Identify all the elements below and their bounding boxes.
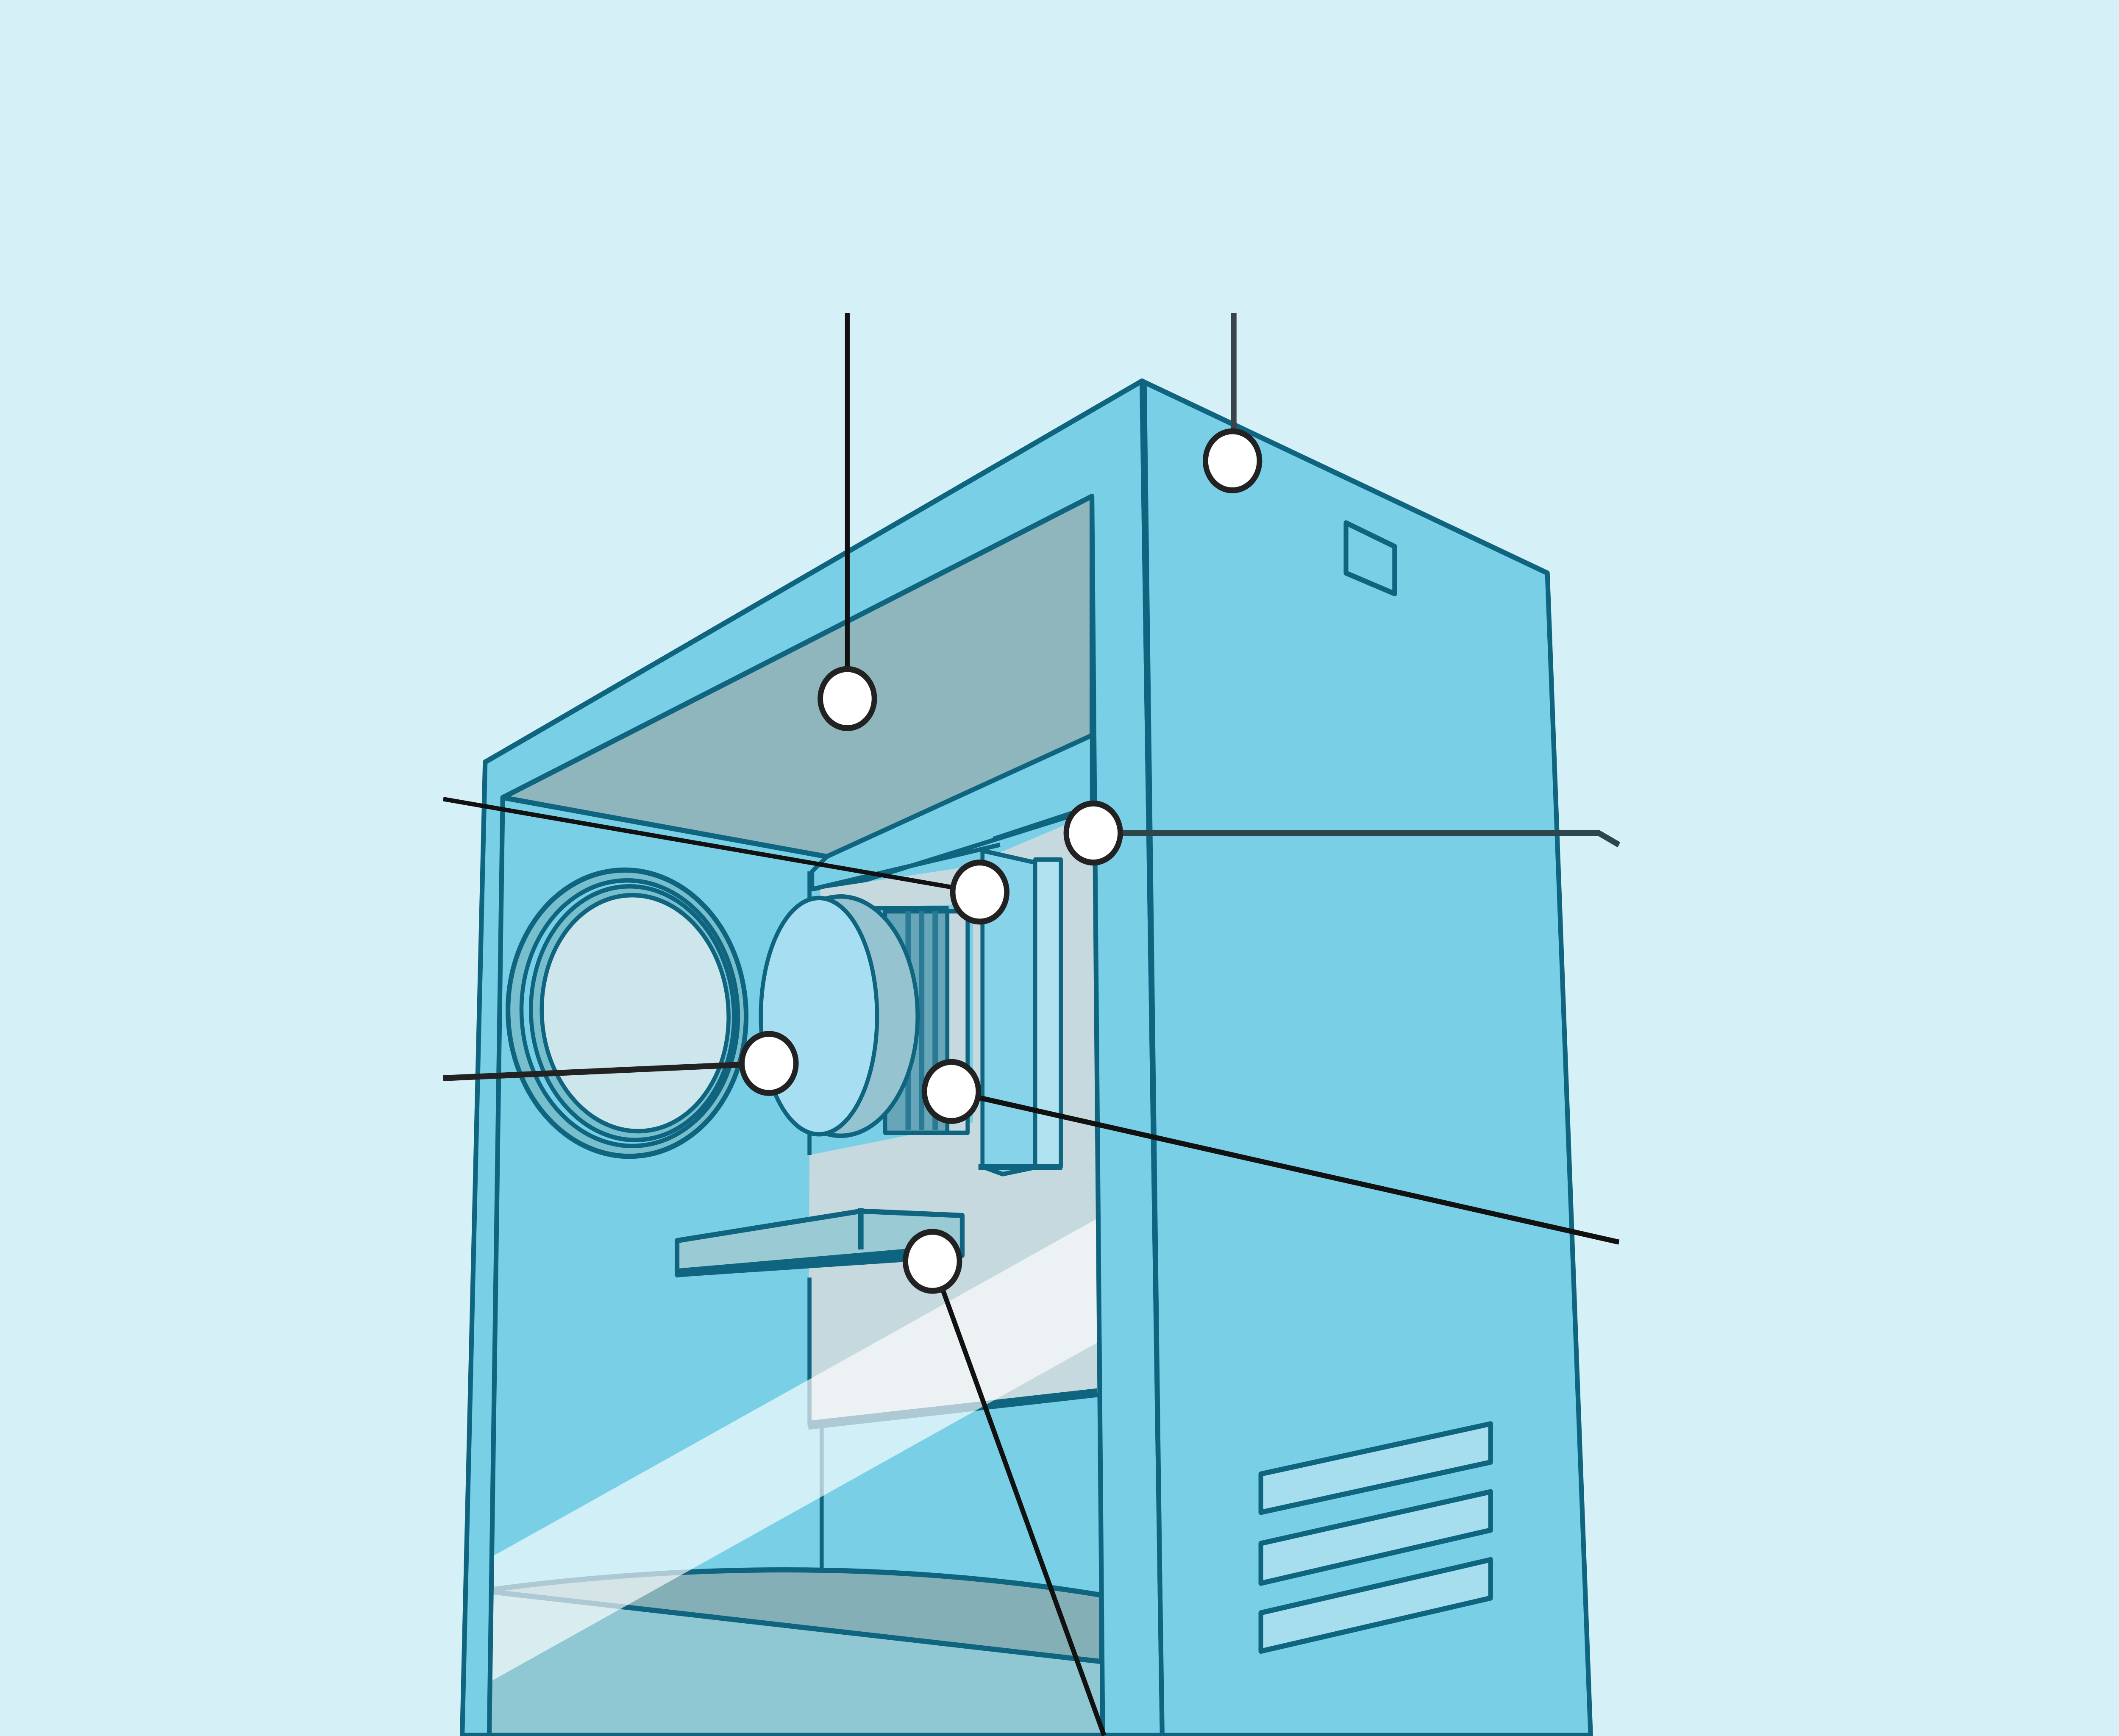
upper rear strip xyxy=(812,735,1092,889)
floor xyxy=(489,1570,1101,1736)
light reflection band xyxy=(489,1219,1103,1682)
side panel square port xyxy=(1346,523,1395,594)
callout: top right xyxy=(1205,313,1260,490)
computer case xyxy=(462,381,1591,1736)
rear wall light panel xyxy=(808,812,1097,1425)
case side panel xyxy=(1142,381,1591,1736)
callout: left upper xyxy=(443,799,1007,921)
fan module block xyxy=(885,911,947,1133)
interior base xyxy=(489,496,1103,1736)
cylinder back xyxy=(764,896,918,1136)
callout: left lower xyxy=(443,1034,796,1093)
front window and interior xyxy=(489,496,1103,1736)
callout: top centre xyxy=(820,313,874,728)
case front frame xyxy=(462,381,1162,1736)
window frame xyxy=(489,496,1103,1736)
cylinder front xyxy=(761,898,877,1134)
ceiling panel xyxy=(503,496,1092,857)
top light strip xyxy=(820,865,976,907)
case corner line xyxy=(1145,381,1162,1736)
large fan rings xyxy=(495,857,759,1169)
horizontal shelf xyxy=(676,1208,962,1274)
callout: right lower xyxy=(924,1062,1619,1242)
callout: right upper xyxy=(1066,804,1619,862)
narrow light column xyxy=(947,911,968,1133)
diagram: computer tower with callouts xyxy=(443,313,1621,1736)
side vents xyxy=(1261,1424,1491,1651)
callout: bottom xyxy=(905,1232,1104,1736)
expansion card xyxy=(979,851,1062,1174)
rear wall edge lines xyxy=(809,871,822,1569)
